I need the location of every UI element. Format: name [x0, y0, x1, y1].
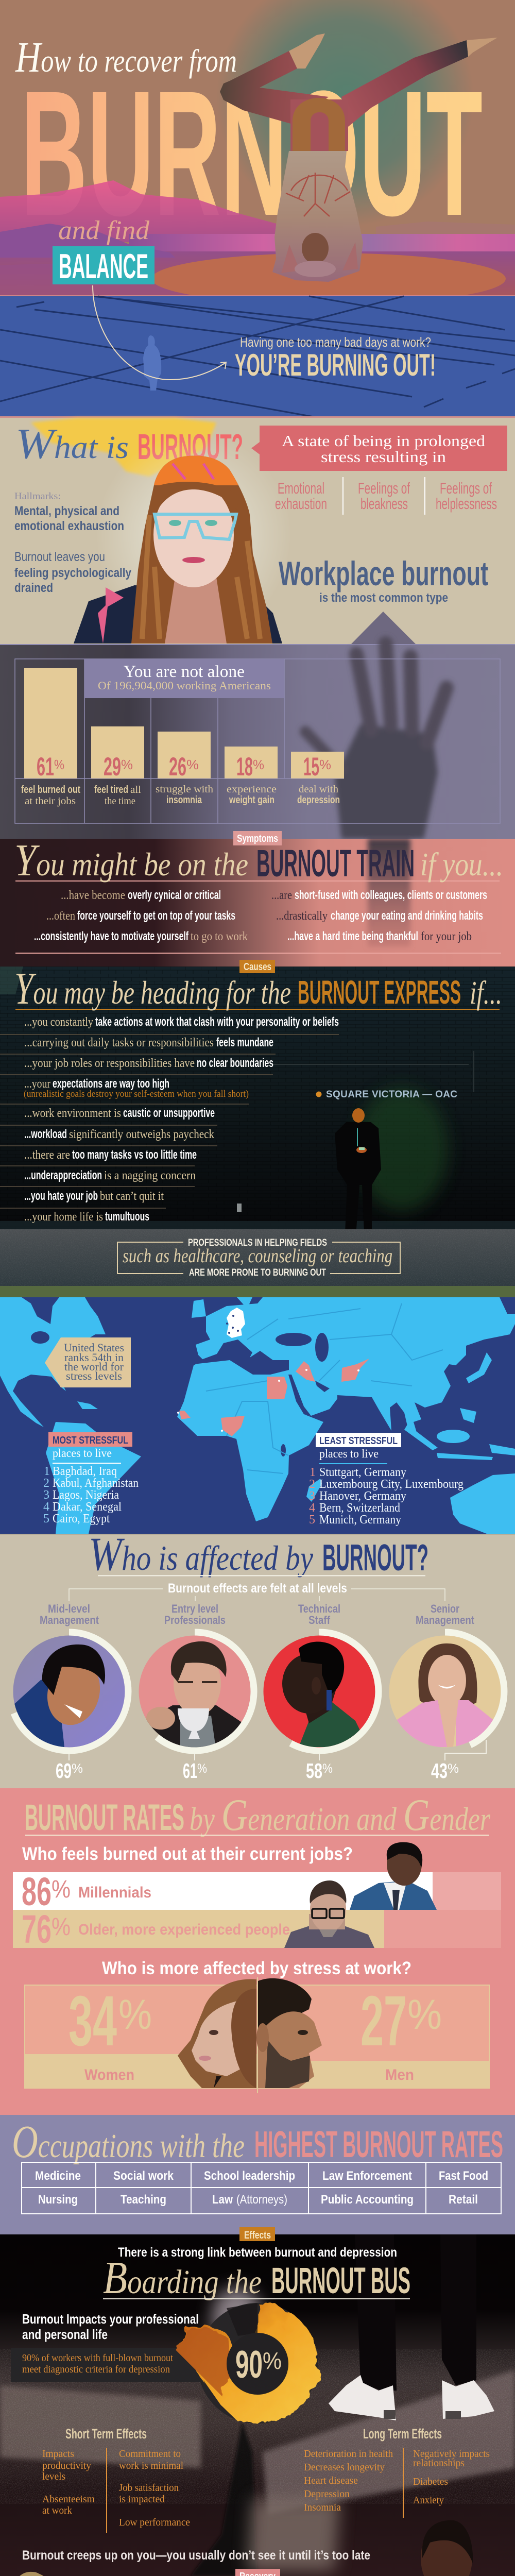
list: least stressful places: Bern, Switzerland — [319, 1501, 400, 1515]
list: most stressful places: 3 — [43, 1488, 49, 1502]
text block: workplace burnout — [279, 554, 488, 605]
heading — [14, 836, 503, 886]
hero section — [0, 0, 515, 304]
occupations table: Law Enforcement — [322, 2169, 412, 2183]
chart: gender comparison: Women — [84, 2066, 134, 2083]
header: you are not alone: Of 196,904,000 working Americans — [98, 679, 271, 692]
chart: generation bars: % — [52, 1876, 71, 1903]
occupations table: Retail — [449, 2193, 478, 2207]
cause list: tumultuous — [105, 1210, 149, 1224]
list: short term effects: is impacted — [119, 2494, 165, 2505]
tag: causes — [239, 960, 275, 973]
text: impacts professional life: 90% of workers with full-blown burnout — [22, 2352, 173, 2364]
bar labels: experience — [227, 784, 277, 795]
cause list: no clear boundaries — [197, 1056, 273, 1070]
bar chart: % — [121, 757, 133, 772]
symptom list: to go to work — [191, 930, 248, 943]
percentages by level: 61 — [183, 1759, 197, 1783]
cause list: caustic or unsupportive — [123, 1106, 215, 1120]
cause list: but can’t quit it — [100, 1190, 164, 1203]
cause list: ...your — [24, 1077, 50, 1091]
bar labels: the time — [105, 795, 135, 807]
text block: hallmarks: emotional exhaustion — [14, 519, 124, 533]
text: impacts professional life — [22, 2311, 199, 2375]
bar chart: % — [186, 757, 199, 772]
chart: generation bars — [13, 1870, 501, 1952]
headline: burning out: Having one too many bad days at work? — [240, 334, 431, 350]
callout: state of prolonged stress: stress resulting in — [321, 448, 447, 466]
list: least stressful places: Munich, Germany — [319, 1513, 401, 1527]
symptom list: force yourself to get on top of your tasks — [77, 909, 235, 923]
symptom list: ...are — [271, 889, 292, 902]
callout: United States rank: the world for — [64, 1360, 124, 1373]
cause list: significantly outweighs paycheck — [69, 1128, 214, 1141]
heading: BURNOUT RATES — [25, 1798, 184, 1838]
list: most stressful places: 5 — [43, 1512, 49, 1526]
occupations table: Public Accounting — [321, 2193, 414, 2207]
chart: generation bars: 86 — [22, 1870, 52, 1914]
arrow: curved arrow to headline — [93, 285, 226, 380]
heading — [25, 1790, 491, 1840]
list: most stressful places: Cairo, Egypt — [53, 1512, 110, 1526]
list: most stressful places: Baghdad, Iraq — [53, 1465, 117, 1478]
percentages by level: % — [197, 1761, 207, 1776]
callout text — [123, 1238, 392, 1278]
percentages by level — [56, 1759, 459, 1783]
call to action: BALANCE box — [53, 216, 154, 286]
list: long term effects: Decreases longevity — [304, 2462, 385, 2473]
text block: hallmarks: feeling psychologically — [14, 566, 131, 580]
percentages by level: 69 — [56, 1759, 72, 1783]
results: three feelings — [275, 477, 497, 515]
text block: hallmarks: Hallmarks: — [14, 491, 61, 502]
portrait: senior management — [389, 1632, 504, 1748]
bar chart: 18 — [236, 752, 253, 781]
portrait: technical staff — [264, 1632, 379, 1751]
heading — [103, 2252, 410, 2303]
panel: causes burnout express — [0, 960, 515, 1233]
text block: hallmarks: drained — [14, 581, 53, 595]
job level labels: Technical — [298, 1602, 340, 1615]
list: least stressful places: 5 — [309, 1513, 315, 1527]
callout: United States rank — [45, 1337, 131, 1387]
list: long term effects: Deterioration in health — [304, 2448, 393, 2460]
job level labels: Professionals — [164, 1614, 226, 1626]
list: most stressful places: Lagos, Nigeria — [53, 1488, 119, 1502]
portrait: mid-level management — [13, 1632, 128, 1751]
results: three feelings: Feelings of — [358, 479, 410, 497]
subheading: stress at work: Who is more affected by stress at work? — [102, 1958, 411, 1978]
cause list: ...your job roles or responsibilities have — [24, 1057, 195, 1070]
figure: legs and white sneakers — [329, 2234, 494, 2420]
bar labels: struggle with — [156, 784, 213, 795]
text: depression link: There is a strong link between burnout and depression — [118, 2245, 397, 2260]
list: most stressful places — [43, 1432, 139, 1526]
callout: United States rank: United States — [64, 1341, 124, 1354]
chart: generation bars: 76 — [22, 1907, 52, 1952]
tag: symptoms: Symptoms — [237, 833, 278, 844]
heading: if... — [470, 974, 502, 1011]
bar chart: 29 — [104, 752, 121, 781]
panel: occupations with highest burnout — [0, 2115, 515, 2234]
cause list: (unrealistic goals destroy your self-esteem when you fall short) — [24, 1089, 249, 1099]
bar labels: deal with — [299, 784, 338, 795]
results: three feelings: exhaustion — [275, 495, 327, 513]
list: most stressful places: Dakar, Senegal — [53, 1500, 122, 1514]
results: three feelings: bleakness — [360, 495, 408, 513]
text block: hallmarks: Burnout leaves you — [14, 550, 105, 564]
cause list: expectations are way too high — [53, 1077, 169, 1091]
woman portrait — [74, 433, 291, 643]
chart: gender comparison — [25, 1977, 489, 2093]
heading: You may be heading for the — [14, 964, 291, 1014]
list: most stressful places: 2 — [43, 1477, 49, 1490]
symptom list: ...consistently have to motivate yourself — [34, 929, 189, 943]
tag: causes: Causes — [244, 961, 271, 973]
occupations table: School leadership — [204, 2169, 295, 2183]
symptom list: ...have a hard time being thankful — [287, 929, 418, 943]
list: long term effects: Anxiety — [413, 2495, 444, 2506]
symptom list: ...drastically — [276, 909, 328, 923]
icon: hand silhouette — [305, 643, 447, 839]
list: least stressful places: Stuttgart, Germany — [319, 1466, 406, 1479]
bar chart: % — [319, 757, 331, 772]
results: three feelings: Emotional — [278, 479, 324, 497]
callout: state of prolonged stress — [251, 426, 507, 471]
list: most stressful places: Kabul, Afghanistan — [53, 1477, 139, 1490]
title: How to recover from: How to recover from — [15, 33, 237, 81]
job level labels: Senior — [431, 1602, 459, 1615]
heading: by Generation and Gender — [190, 1790, 491, 1840]
heading: Occupations with the — [12, 2116, 245, 2167]
cause list: ...work environment is — [24, 1107, 121, 1120]
callout: United States rank: ranks 54th in — [64, 1351, 124, 1364]
list: least stressful places: 2 — [309, 1478, 315, 1491]
list: short term effects — [42, 2426, 190, 2533]
list: long term effects — [304, 2426, 490, 2518]
chart: generation bars: Millennials — [78, 1884, 151, 1901]
list: short term effects: work is minimal — [119, 2460, 183, 2471]
heading — [12, 2116, 503, 2167]
bar labels: all — [130, 784, 141, 795]
list: least stressful places: 3 — [309, 1489, 315, 1503]
bar labels: at their jobs — [25, 795, 76, 807]
icon: yoga headstand figure — [220, 33, 497, 282]
chart: generation bars: % — [52, 1913, 71, 1941]
chart: gender comparison: 27 — [360, 1981, 407, 2061]
chart: generation bars: Older, more experienced people — [78, 1921, 290, 1938]
list: least stressful places: 1 — [310, 1466, 316, 1479]
occupations table: (Attorneys) — [236, 2193, 287, 2207]
bar labels: weight gain — [229, 794, 274, 806]
job level labels: Entry level — [171, 1602, 218, 1615]
occupations table: Social work — [113, 2169, 174, 2183]
heading: Who is affected by — [89, 1528, 314, 1580]
list: least stressful places: Hanover, Germany — [319, 1489, 406, 1503]
cause list: ...you hate your job — [24, 1189, 98, 1203]
text block: workplace burnout: is the most common type — [319, 591, 448, 605]
occupations table: Fast Food — [439, 2169, 488, 2183]
figure: meditating woman — [0, 2572, 59, 2576]
chart: 90% flaming donut: 90 — [235, 2343, 263, 2386]
icon: wall outlet — [237, 1204, 242, 1212]
occupations table — [22, 2162, 501, 2214]
list: short term effects: Commitment to — [119, 2448, 181, 2460]
tag: effects — [239, 2227, 275, 2241]
symptom list — [34, 888, 487, 943]
job level labels: Staff — [308, 1614, 331, 1626]
text block: hallmarks: Mental, physical and — [14, 504, 119, 518]
panel: what is burnout — [0, 418, 515, 644]
cause list: feels mundane — [216, 1036, 273, 1049]
panel: you are not alone — [0, 643, 515, 839]
text: impacts professional life: and personal life — [22, 2327, 108, 2342]
text: impacts professional life: meet diagnostic criteria for depression — [22, 2364, 170, 2375]
list: long term effects: Long Term Effects — [363, 2426, 442, 2442]
cause list: is a nagging concern — [104, 1169, 196, 1182]
list: least stressful places: 4 — [309, 1501, 315, 1515]
percentages by level: 43 — [431, 1759, 448, 1783]
bar chart: 61 — [37, 752, 54, 781]
cause list: ...your home life is — [24, 1210, 103, 1224]
symptom list: overly cynical or critical — [128, 888, 221, 902]
list: most stressful places: 4 — [43, 1500, 49, 1514]
call to action: BALANCE box: BALANCE — [59, 247, 148, 286]
occupations table: Nursing — [38, 2193, 78, 2207]
tag: symptoms — [233, 831, 282, 845]
percentages by level: % — [322, 1761, 333, 1776]
bar chart: % — [253, 757, 264, 772]
subheading: current jobs: Who feels burned out at their current jobs? — [22, 1844, 353, 1864]
figure: person on platform — [335, 1108, 381, 1233]
bar labels — [21, 784, 340, 807]
callout text: ARE MORE PRONE TO BURNING OUT — [189, 1267, 326, 1278]
list: long term effects: relationships — [413, 2458, 465, 2469]
map: highlighted countries — [177, 1308, 369, 1436]
bar chart: % — [54, 757, 64, 772]
headline: burning out — [235, 334, 436, 382]
header: you are not alone — [84, 659, 284, 698]
arrow: pointing up to workplace burnout — [351, 612, 416, 644]
chart: gender comparison: % — [118, 1991, 152, 2038]
callout text: PROFESSIONALS IN HELPING FIELDS — [188, 1238, 327, 1248]
heading: Boarding the — [103, 2252, 262, 2303]
bar labels: insomnia — [166, 794, 202, 806]
symptom list: for your job — [421, 930, 472, 943]
list: long term effects: Diabetes — [413, 2476, 448, 2487]
heading — [15, 420, 243, 468]
occupations table: Law — [212, 2193, 233, 2207]
list: short term effects: levels — [42, 2471, 65, 2482]
call to action: BALANCE box: and find — [58, 216, 150, 245]
portrait: older man with glasses — [284, 1880, 374, 1948]
text: burnout creeps up: Burnout creeps up on you—you usually don’t see it until it’s too late — [22, 2548, 370, 2563]
callout: United States rank: stress levels — [66, 1369, 122, 1382]
subheading: Burnout effects are felt at all levels — [168, 1581, 347, 1596]
panel: recovery burnout depot — [0, 2520, 515, 2576]
list: long term effects: Negatively impacts — [413, 2448, 490, 2460]
job level labels: Management — [416, 1614, 475, 1626]
list: least stressful places: places to live — [319, 1447, 379, 1460]
panel: helping professions platform — [0, 1229, 515, 1297]
cause list: ...underappreciation — [24, 1168, 102, 1182]
list: most stressful places: 1 — [44, 1465, 50, 1478]
list: most stressful places: MOST STRESSFUL — [53, 1435, 128, 1446]
cause list: take actions at work that clash with your personality or beliefs — [95, 1015, 339, 1029]
header: you are not alone: You are not alone — [124, 663, 245, 681]
map: continents — [0, 1297, 515, 1534]
icon: small standing person — [143, 335, 161, 391]
portrait: woman half face — [178, 1979, 256, 2088]
panel: effects burnout bus — [0, 2227, 515, 2576]
list: least stressful places: LEAST STRESSFUL — [319, 1435, 398, 1447]
figure: man checking watch — [386, 2520, 515, 2576]
tag: effects: Effects — [244, 2230, 271, 2241]
job level labels: Mid-level — [48, 1602, 90, 1615]
list: short term effects: Absenteeism — [42, 2494, 95, 2505]
tag: recovery — [235, 2569, 280, 2576]
percentages by level: 58 — [306, 1759, 322, 1783]
panel: symptoms burnout train — [0, 831, 515, 967]
list: long term effects: Depression — [304, 2488, 350, 2500]
mountains and yoga mat — [0, 180, 515, 304]
cause list: ...there are — [24, 1148, 70, 1162]
cause list: ...workload — [24, 1127, 67, 1141]
list: short term effects: Job satisfaction — [119, 2482, 179, 2494]
list: long term effects: Insomnia — [304, 2502, 341, 2513]
heading: You might be on the — [14, 836, 248, 886]
portrait: man half face — [256, 1978, 322, 2088]
portrait: young professional man — [350, 1842, 437, 1910]
list: short term effects: at work — [42, 2505, 72, 2516]
bar chart — [24, 668, 344, 781]
list: short term effects: Short Term Effects — [65, 2426, 147, 2442]
section: bad days banner — [0, 285, 515, 418]
chart: gender comparison: 34 — [68, 1981, 117, 2061]
cause list: too many tasks vs too little time — [72, 1148, 197, 1162]
chart: 90% flaming donut: % — [263, 2347, 282, 2374]
list: short term effects: Low performance — [119, 2517, 190, 2528]
station sign: SQUARE VICTORIA — OAC — [326, 1089, 457, 1100]
panel: burnout rates by generation and gender — [0, 1788, 515, 2115]
list: long term effects: Heart disease — [304, 2475, 358, 2486]
bar labels: depression — [297, 794, 340, 806]
list: short term effects: productivity — [42, 2460, 91, 2471]
chart: gender comparison: Men — [385, 2066, 414, 2083]
symptom list: ...have become — [61, 889, 125, 902]
list: least stressful places — [309, 1433, 464, 1527]
cause list: ...carrying out daily tasks or responsibilities — [24, 1036, 214, 1049]
cause list — [24, 1015, 339, 1224]
occupations table: Teaching — [121, 2193, 166, 2207]
chart: gender comparison: % — [407, 1991, 442, 2038]
job level labels: Management — [40, 1614, 99, 1626]
bar chart: 26 — [169, 752, 186, 781]
list: short term effects: Impacts — [42, 2448, 74, 2460]
panel: who is affected — [0, 1528, 515, 1788]
job level labels — [40, 1602, 475, 1626]
cause list: ...you constantly — [24, 1015, 93, 1029]
percentages by level: % — [72, 1761, 83, 1776]
text: impacts professional life: Burnout Impacts your professional — [22, 2311, 199, 2327]
portrait: entry level professionals — [139, 1632, 254, 1752]
percentages by level: % — [448, 1761, 459, 1776]
bar labels: feel burned out — [21, 784, 80, 795]
heading: BURNOUT? — [138, 427, 243, 467]
text block: hallmarks — [14, 491, 131, 595]
list: least stressful places: Luxembourg City, Luxembourg — [319, 1478, 464, 1491]
bar chart: 15 — [303, 752, 319, 781]
occupations table: Medicine — [35, 2169, 81, 2183]
panel: world stress map — [0, 1297, 515, 1534]
symptom list: ...often — [46, 909, 75, 923]
bar labels: feel tired — [94, 784, 128, 795]
stat box — [11, 2348, 207, 2382]
heading: What is — [15, 420, 129, 468]
callout: state of prolonged stress: A state of being in prolonged — [282, 432, 486, 450]
chart: 90% flaming donut — [178, 2303, 318, 2424]
list: most stressful places: places to live — [53, 1447, 112, 1460]
callout text: such as healthcare, counseling or teaching — [123, 1245, 392, 1267]
